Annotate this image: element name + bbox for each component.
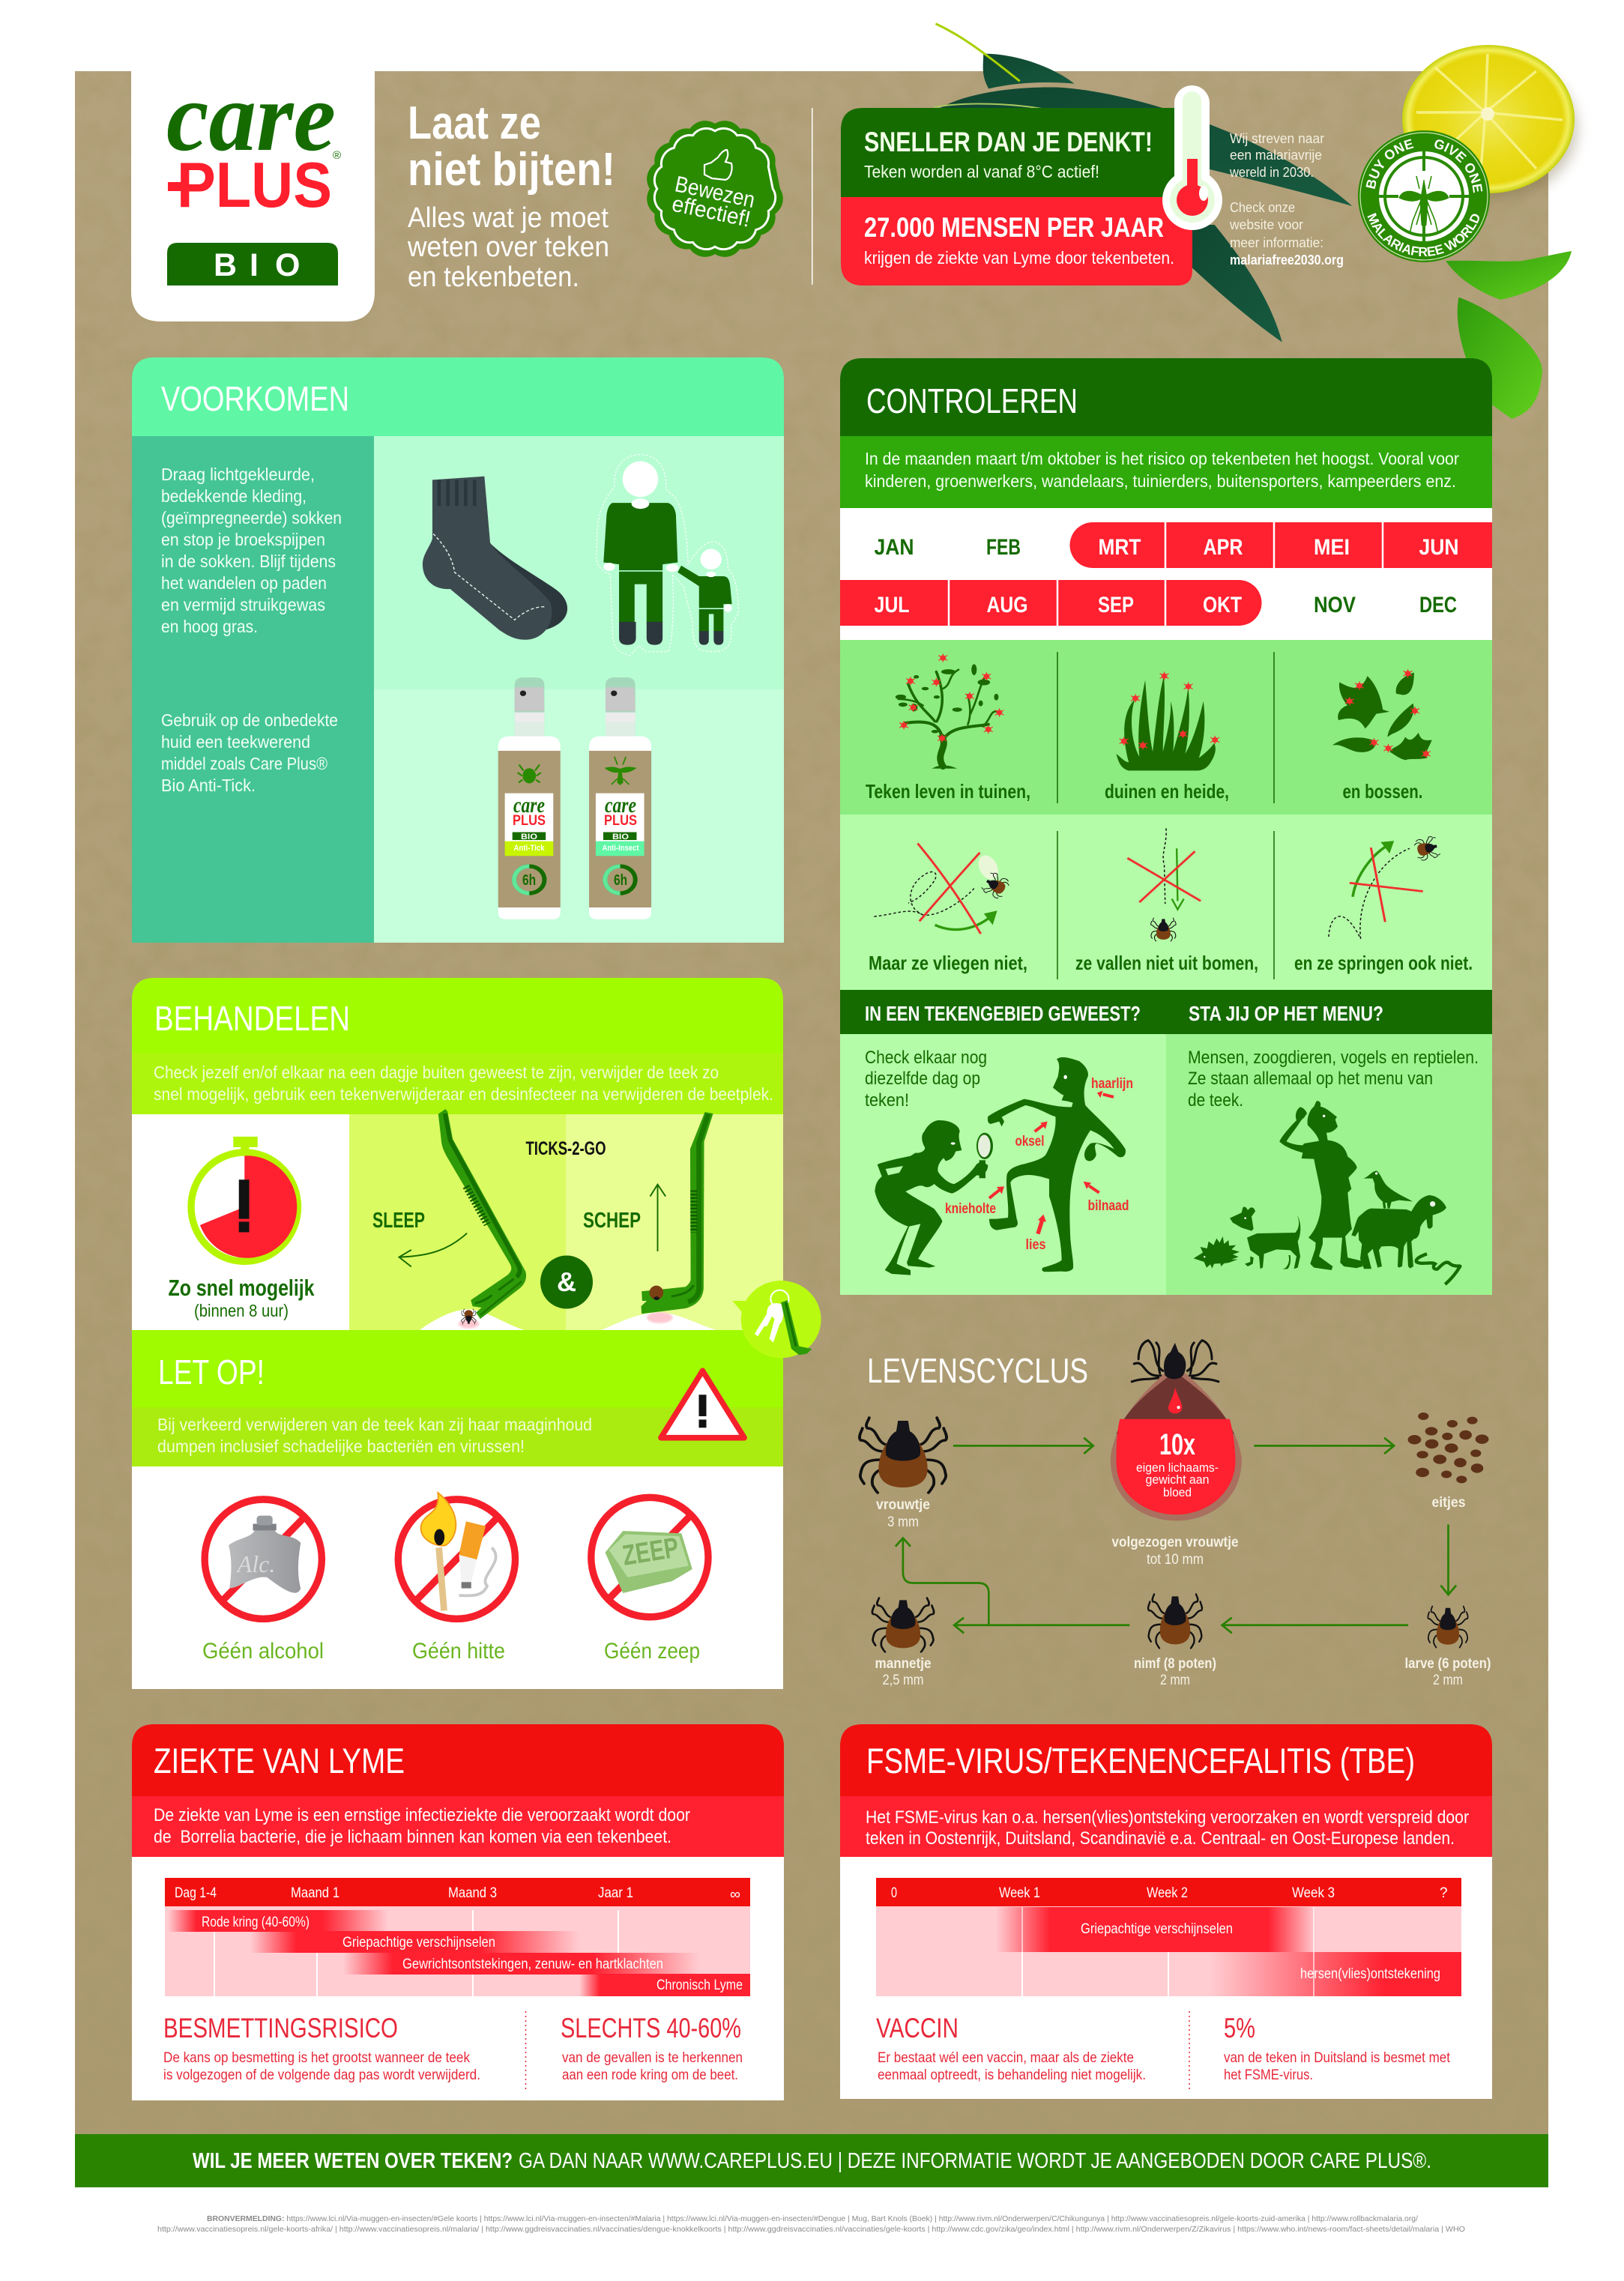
icon: engorged tick — [1111, 1341, 1242, 1520]
eucalyptus leaves behind header — [934, 24, 1352, 342]
title — [407, 97, 615, 293]
caption: zo snel mogelijk — [168, 1275, 315, 1320]
footer bar — [75, 2134, 1548, 2187]
panel: let op — [132, 1330, 783, 1689]
label: volgezogen vrouwtje: tot 10 mm — [1147, 1552, 1204, 1568]
text block: clothing — [161, 465, 342, 636]
label: vrouwtje: 3 mm — [887, 1514, 919, 1530]
chart: fsme timeline: Week 1 — [999, 1885, 1040, 1901]
text: malariafree: wereld in 2030. — [1229, 165, 1314, 180]
icon: no soap — [591, 1497, 708, 1617]
chart: fsme timeline: Week 3 — [1292, 1885, 1335, 1901]
calendar: high risk months: MEI — [1314, 535, 1350, 560]
arrow: drag — [399, 1233, 467, 1266]
badge: malaria free world: GIVE ONE — [1434, 139, 1482, 193]
icon: no heat — [398, 1493, 516, 1619]
sources: http://www.vaccinatiesopreis.nl/gele-koorts-afrika/ | http://www.vaccinatiesopreis.nl/malaria/ | http://www.ggdreisvaccinaties.nl/vaccinaties/dengue-knokkelkoorts | http://www.ggdreisvaccinaties.nl/vaccinaties/gele-koorts | http://www.cdc.gov/zika/geo/index.html | http://www.rivm.nl/Onderwerpen/Z/Zikavirus | https://www.who.int/news-room/fact-sheets/detail/malaria | WHO — [157, 2225, 1465, 2234]
labels: body parts — [945, 1076, 1133, 1253]
label: 10x blood: 10x — [1159, 1428, 1195, 1461]
arrow: lift — [650, 1185, 665, 1251]
bar: subheadings: IN EEN TEKENGEBIED GEWEEST? — [865, 1002, 1141, 1025]
caption: zo snel mogelijk: Zo snel mogelijk — [168, 1275, 315, 1301]
label: volgezogen vrouwtje: volgezogen vrouwtje — [1112, 1535, 1238, 1550]
text: malariafree: Wij streven naar — [1230, 131, 1324, 146]
stat: besmettingsrisico: BESMETTINGSRISICO — [163, 2013, 398, 2043]
text block: clothing: het wandelen op paden — [161, 573, 327, 593]
sleep step — [372, 1109, 526, 1330]
chart: fsme timeline: hersen(vlies)ontstekening — [1300, 1966, 1440, 1982]
icon: tick remover lifting — [602, 1112, 716, 1330]
caption: zo snel mogelijk: (binnen 8 uur) — [194, 1301, 289, 1320]
chart: fsme timeline: 0 — [891, 1885, 897, 1901]
text: malariafree: Check onze — [1230, 200, 1295, 215]
stat: slechts 40-60%: van de gevallen is te herkennen — [562, 2050, 743, 2066]
icon: tree — [896, 653, 1003, 769]
text block: spray: middel zoals Care Plus® — [161, 754, 327, 773]
product: anti-insect bottle: care — [605, 793, 636, 818]
captions: habitat row — [866, 780, 1422, 803]
chart: lyme timeline: Griepachtige verschijnselen — [342, 1935, 495, 1951]
product: anti-tick bottle: 6h — [522, 872, 536, 889]
icon: warning triangle — [661, 1371, 744, 1438]
labels: body parts: oksel — [1015, 1134, 1045, 1149]
schep step — [583, 1112, 716, 1330]
text block — [865, 449, 1459, 491]
icon: no flying — [874, 843, 1011, 934]
callout: sneller dan je denkt: SNELLER DAN JE DENKT! — [864, 127, 1153, 157]
label: vrouwtje: vrouwtje — [876, 1497, 930, 1513]
calendar: high risk months: AUG — [986, 593, 1028, 617]
label: geen alcohol: Géén alcohol — [202, 1639, 324, 1664]
text: zeep on soap: ZEEP — [621, 1532, 680, 1572]
badge: bewezen effectief: Bewezen — [673, 172, 757, 213]
chart: lyme timeline: Chronisch Lyme — [656, 1978, 743, 1993]
text block: Het FSME-virus kan o.a. hersen(vlies)ontsteking veroorzaken en wordt verspreid door — [866, 1807, 1469, 1828]
stat: besmettingsrisico — [163, 2013, 480, 2083]
heading: LET OP! — [158, 1353, 265, 1392]
chart: lyme timeline: Dag 1-4 — [175, 1885, 217, 1901]
product: anti-insect bottle: BIO — [612, 833, 629, 842]
captions: habitat row: Teken leven in tuinen, — [866, 780, 1030, 803]
text: malariafree: website voor — [1229, 217, 1303, 232]
product: anti-insect bottle — [589, 677, 651, 919]
text block — [866, 1807, 1469, 1849]
callout: 27.000 mensen per jaar — [841, 197, 1192, 285]
label: mannetje: 2,5 mm — [883, 1673, 923, 1688]
icon: mosquito — [1399, 176, 1449, 234]
heading: ZIEKTE VAN LYME — [154, 1741, 405, 1780]
bar: subheadings — [840, 990, 1492, 1034]
logo: bio bar: BIO — [214, 247, 300, 283]
calendar: high risk months: JUL — [874, 593, 910, 617]
stat: slechts 40-60%: SLECHTS 40-60% — [561, 2013, 741, 2043]
calendar: high risk months — [840, 522, 1492, 626]
label: larve: larve (6 poten) — [1404, 1656, 1491, 1672]
cycle arrows — [896, 1438, 1456, 1633]
text block: clothing: en hoog gras. — [161, 617, 258, 636]
label: nimf: nimf (8 poten) — [1134, 1656, 1216, 1672]
panel: voorkomen — [132, 357, 784, 943]
captions: myths row: Maar ze vliegen niet, — [869, 952, 1027, 974]
stat: vaccin: VACCIN — [876, 2013, 959, 2043]
icon: male tick — [872, 1598, 934, 1652]
icon: grass — [1117, 672, 1219, 770]
product: anti-tick bottle: care — [513, 793, 545, 818]
icon: tick remover sliding — [420, 1109, 526, 1330]
illustration: person and animals — [1194, 1101, 1460, 1284]
label: eitjes: eitjes — [1431, 1495, 1466, 1511]
chart: fsme timeline: ? — [1440, 1885, 1448, 1901]
icon: forest leaves — [1332, 669, 1432, 760]
text: malariafree: meer informatie: — [1230, 235, 1323, 250]
text block: de Borrelia bacterie, die je lichaam binnen kan komen via een tekenbeet. — [154, 1827, 671, 1847]
icon: female tick — [860, 1418, 947, 1493]
heading: CONTROLEREN — [866, 381, 1078, 420]
sources: BRONVERMELDING: https://www.lci.nl/Via-muggen-en-insecten/#Gele koorts | https://www.lci.nl/Via-muggen-en-insecten/#Malaria | https://www.lci.nl/Via-muggen-en-insecten/#Dengue | Mug, Bart Knols (Boek) | http://www.rivm.nl/Onderwerpen/C/Chikungunya | http://www.vaccinatiesopreis.nl/gele-koorts-zuid-amerika | http://www.rollbackmalaria.org/ — [207, 2214, 1418, 2223]
text: malariafree: malariafree2030.org — [1230, 253, 1344, 268]
panel: on the menu: Mensen, zoogdieren, vogels en reptielen. — [1188, 1048, 1479, 1068]
heading: FSME-VIRUS/TEKENENCEFALITIS (TBE) — [866, 1741, 1415, 1780]
text block: Bij verkeerd verwijderen van de teek kan zij haar maaginhoud — [157, 1415, 592, 1434]
badge: malaria free world: MALARIAFREE WORLD — [1367, 213, 1479, 256]
text block — [154, 1805, 690, 1847]
icon: stopwatch — [191, 1137, 298, 1261]
panel: on the menu: de teek. — [1188, 1090, 1243, 1111]
schep step: SCHEP — [583, 1209, 641, 1233]
text block: De ziekte van Lyme is een ernstige infectieziekte die veroorzaakt wordt door — [154, 1805, 690, 1825]
title: weten over teken — [407, 232, 609, 263]
heading: BEHANDELEN — [154, 999, 350, 1038]
stat: besmettingsrisico: is volgezogen of de volgende dag pas wordt verwijderd. — [163, 2067, 480, 2083]
product: anti-tick bottle — [498, 677, 561, 919]
text block: clothing: en stop je broekspijpen — [161, 530, 325, 549]
text block: clothing: bedekkende kleding, — [161, 486, 307, 506]
label: geen hitte: Géén hitte — [412, 1639, 505, 1664]
labels: body parts: haarlijn — [1091, 1076, 1133, 1092]
logo: plus: PLUS — [177, 150, 332, 221]
chart: lyme timeline: Jaar 1 — [598, 1885, 633, 1901]
title: Laat ze — [408, 97, 541, 149]
stat: 5% — [1224, 2013, 1451, 2083]
icon: eggs — [1408, 1413, 1488, 1483]
chart: fsme timeline — [876, 1878, 1461, 1996]
chart: lyme timeline: ∞ — [730, 1887, 740, 1903]
panel: on the menu — [1166, 1034, 1492, 1295]
calendar: high risk months: JUN — [1419, 535, 1458, 560]
logo: plus: ® — [333, 149, 341, 162]
panel: ziekte van lyme — [132, 1724, 784, 2100]
logo: care: care — [166, 61, 336, 172]
chart: lyme timeline — [165, 1878, 750, 1996]
calendar: high risk months: JAN — [874, 535, 914, 560]
icon: ampersand: & — [557, 1266, 576, 1297]
text block: In de maanden maart t/m oktober is het risico op tekenbeten het hoogst. Vooral voor — [865, 449, 1459, 468]
label: nimf: 2 mm — [1160, 1673, 1190, 1688]
stat: 5%: 5% — [1224, 2013, 1255, 2043]
chart: fsme timeline: Griepachtige verschijnselen — [1081, 1921, 1233, 1937]
text block: clothing: Draag lichtgekleurde, — [161, 465, 315, 484]
heading: VOORKOMEN — [161, 379, 349, 418]
product: anti-tick bottle: BIO — [521, 833, 537, 842]
product: anti-tick bottle: Anti-Tick — [514, 844, 545, 853]
callout: 27.000 mensen per jaar: krijgen de ziekte van Lyme door tekenbeten. — [864, 248, 1174, 268]
icon: thumbs up — [704, 150, 732, 180]
label: mannetje: mannetje — [875, 1656, 931, 1672]
product: anti-insect bottle: Anti-Insect — [603, 844, 639, 853]
text block: clothing: (geïmpregneerde) sokken — [161, 508, 342, 528]
labels: body parts: lies — [1025, 1237, 1046, 1253]
stat: besmettingsrisico: De kans op besmetting is het grootst wanneer de teek — [163, 2050, 470, 2066]
label: geen zeep: Géén zeep — [604, 1639, 700, 1664]
captions: myths row: en ze springen ook niet. — [1294, 952, 1473, 974]
logo: bio bar — [167, 243, 338, 285]
title: en tekenbeten. — [408, 262, 579, 293]
footer bar: GA DAN NAAR WWW.CAREPLUS.EU | DEZE INFORMATIE WORDT JE AANGEBODEN DOOR CARE PLUS®. — [519, 2149, 1431, 2173]
text: malariafree — [1229, 131, 1344, 268]
product: anti-tick bottle: PLUS — [513, 813, 546, 829]
panel: check each other: teken! — [865, 1090, 909, 1111]
stat: vaccin — [876, 2013, 1146, 2083]
text block: snel mogelijk, gebruik een tekenverwijderaar en desinfecteer na verwijderen de beetplek. — [154, 1084, 773, 1104]
label: larve — [1404, 1656, 1491, 1688]
text: alc on flask: Alc. — [236, 1550, 275, 1577]
icon: keychain tool — [732, 1281, 821, 1358]
calendar: high risk months: OKT — [1203, 593, 1242, 617]
text block: spray — [161, 710, 338, 795]
icon: sock — [423, 477, 567, 640]
text block: spray: Gebruik op de onbedekte — [161, 710, 338, 730]
body-part arrows — [989, 1091, 1114, 1234]
label: vrouwtje — [876, 1497, 930, 1530]
footer bar: WIL JE MEER WETEN OVER TEKEN? — [193, 2149, 513, 2173]
sources — [157, 2214, 1465, 2234]
chart: fsme timeline: Week 2 — [1147, 1885, 1188, 1901]
labels: body parts: bilnaad — [1088, 1198, 1129, 1214]
chart: lyme timeline: Maand 3 — [448, 1885, 497, 1901]
panel: check each other: diezelfde dag op — [865, 1069, 980, 1089]
lemon — [1402, 45, 1577, 198]
icon: larva tick — [1428, 1607, 1468, 1648]
callout: sneller dan je denkt — [841, 108, 1192, 197]
product: anti-insect bottle: 6h — [614, 872, 627, 889]
label: 10x blood — [1136, 1428, 1219, 1499]
green leaves right — [1446, 251, 1572, 419]
title: niet bijten! — [408, 144, 615, 196]
label: ticks-2-go: TICKS-2-GO — [526, 1138, 606, 1159]
labels: body parts: knieholte — [945, 1201, 996, 1217]
text block: clothing: en vermijd struikgewas — [161, 595, 325, 614]
chart: lyme timeline: Rode kring (40-60%) — [202, 1915, 310, 1930]
sleep step: SLEEP — [372, 1209, 425, 1233]
calendar: high risk months: SEP — [1098, 593, 1134, 617]
label: 10x blood: bloed — [1163, 1485, 1192, 1499]
callout: sneller dan je denkt: Teken worden al vanaf 8°C actief! — [864, 162, 1099, 181]
icon: no jumping — [1329, 836, 1440, 939]
text block: spray: Bio Anti-Tick. — [161, 776, 256, 795]
captions: habitat row: en bossen. — [1343, 780, 1422, 803]
captions: myths row: ze vallen niet uit bomen, — [1075, 952, 1258, 974]
label: larve: 2 mm — [1433, 1673, 1463, 1688]
calendar: high risk months: MRT — [1099, 535, 1141, 560]
title: Alles wat je moet — [408, 202, 609, 234]
text: malariafree: een malariavrije — [1230, 148, 1322, 163]
product: anti-insect bottle: PLUS — [604, 813, 637, 829]
panel: behandelen — [75, 358, 1548, 2234]
captions: habitat row: duinen en heide, — [1105, 780, 1229, 803]
label: nimf — [1134, 1656, 1216, 1688]
stat: 5%: van de teken in Duitsland is besmet met — [1224, 2050, 1451, 2066]
label: 10x blood: gewicht aan — [1145, 1472, 1210, 1487]
callout: 27.000 mensen per jaar: 27.000 MENSEN PER JAAR — [864, 212, 1164, 243]
icon: no falling — [1127, 828, 1201, 941]
heading: LEVENSCYCLUS — [867, 1351, 1088, 1390]
label: volgezogen vrouwtje — [1112, 1535, 1238, 1568]
captions: myths row — [869, 952, 1473, 974]
text block: clothing: in de sokken. Blijf tijdens — [161, 552, 336, 571]
icon: nymph tick — [1148, 1594, 1202, 1648]
text block: dumpen inclusief schadelijke bacteriën en virussen! — [157, 1436, 525, 1456]
calendar: high risk months: DEC — [1419, 593, 1457, 617]
icon: no alcohol — [205, 1499, 322, 1619]
text block — [154, 1063, 773, 1104]
chart: lyme timeline: Gewrichtsontstekingen, zenuw- en hartklachten — [402, 1957, 663, 1972]
icon: thermometer — [1162, 85, 1222, 230]
bar: subheadings: STA JIJ OP HET MENU? — [1189, 1002, 1383, 1025]
calendar: high risk months: FEB — [986, 535, 1021, 560]
badge: bewezen effectief — [647, 121, 783, 257]
calendar: high risk months: NOV — [1314, 593, 1356, 617]
text block: teken in Oostenrijk, Duitsland, Scandinavië e.a. Centraal- en Oost-Europese landen. — [866, 1828, 1455, 1849]
text block: kinderen, groenwerkers, wandelaars, tuinierders, buitensporters, kampeerders enz. — [865, 471, 1456, 491]
panel: check each other: Check elkaar nog — [865, 1048, 987, 1068]
badge: bewezen effectief: effectief! — [670, 192, 752, 232]
stat: vaccin: Er bestaat wél een vaccin, maar als de ziekte — [878, 2050, 1134, 2066]
icon: ampersand — [540, 1256, 593, 1308]
calendar: high risk months: APR — [1204, 535, 1243, 560]
stat: 5%: het FSME-virus. — [1224, 2067, 1313, 2083]
panel: controleren — [840, 358, 1492, 1295]
logo card — [131, 61, 375, 321]
panel: on the menu: Ze staan allemaal op het menu van — [1188, 1069, 1433, 1089]
text block — [157, 1415, 592, 1456]
illustration: two people checking — [875, 1057, 1126, 1275]
chart: lyme timeline: Maand 1 — [291, 1885, 339, 1901]
text block: spray: huid een teekwerend — [161, 732, 310, 752]
stat: slechts 40-60% — [561, 2013, 743, 2083]
panel: check each other — [840, 1034, 1166, 1295]
badge: malaria free world: BUY ONE — [1365, 139, 1413, 189]
section: levenscyclus — [860, 1341, 1491, 1688]
badge: malaria free world — [1358, 130, 1490, 262]
label: mannetje — [875, 1656, 931, 1688]
stat: slechts 40-60%: aan een rode kring om de beet. — [562, 2067, 738, 2083]
panel: fsme-virus — [840, 1724, 1492, 2099]
label: 10x blood: eigen lichaams- — [1136, 1460, 1219, 1475]
icon: adult and child — [597, 455, 738, 656]
stat: vaccin: eenmaal optreedt, is behandeling niet mogelijk. — [878, 2067, 1146, 2083]
text block: Check jezelf en/of elkaar na een dagje buiten geweest te zijn, verwijder de teek zo — [154, 1063, 719, 1082]
